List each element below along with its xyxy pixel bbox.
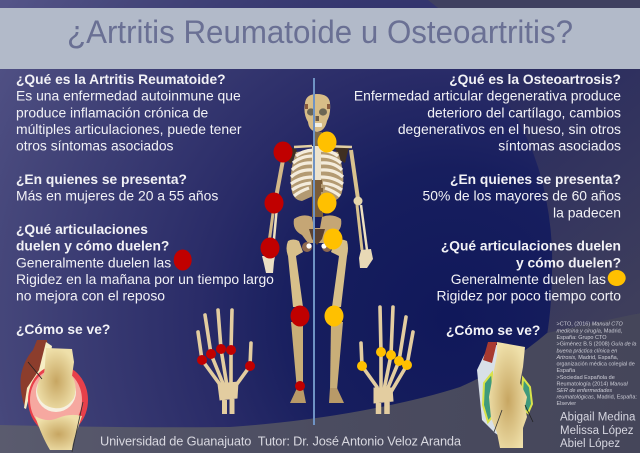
text block: RA joints (16, 254, 274, 304)
text block: RA joints: no mejora con el reposo (16, 288, 165, 304)
references: Artrosis, Madrid, España, (556, 355, 619, 361)
joint illustration: RA (20, 340, 88, 452)
clavicles (294, 146, 352, 147)
text block: RA joints: Rigidez en la mañana por un tiempo largo (16, 271, 274, 287)
text block: OA definition: Enfermedad articular degenerativa produce (354, 88, 621, 104)
heading: joints RA: ¿Qué articulaciones (16, 222, 148, 237)
references: buena práctica clínica en (556, 348, 617, 354)
text block: RA who: Más en mujeres de 20 a 55 años (16, 188, 218, 204)
text block: RA definition: múltiples articulaciones, puede tener (16, 121, 242, 137)
left arm (268, 160, 283, 250)
skeleton (260, 94, 373, 403)
scapulae (284, 147, 349, 164)
right hand x-ray (357, 307, 413, 414)
text block: OA definition: síntomas asociados (498, 138, 621, 154)
rib cage base (291, 150, 343, 201)
heading: what is OA: ¿Qué es la Osteoartrosis? (449, 72, 621, 87)
lower right leg (330, 322, 343, 390)
text block: OA who: la padecen (553, 204, 621, 220)
divider line (313, 78, 315, 425)
right arm (351, 150, 367, 250)
footer credit: Universidad de Guanajuato Tutor: Dr. José Antonio Veloz Aranda (100, 434, 462, 448)
references: medicina y cirugía, Madrid, (556, 328, 623, 334)
authors: Melissa López (560, 425, 634, 437)
heading: joints OA: y cómo duelen? (516, 255, 621, 270)
references: SER de enfermedades (556, 388, 612, 394)
authors (560, 412, 636, 450)
icon: red dot legend (174, 250, 192, 270)
text block: OA who (423, 188, 621, 220)
right side band (468, 60, 640, 335)
heading: joints RA: duelen y cómo duelen? (16, 239, 169, 254)
text block: RA definition: produce inflamación crónica de (16, 104, 209, 120)
left hand carpals (218, 382, 238, 400)
joint illustration: OA (477, 342, 533, 448)
yellow joints (318, 132, 344, 326)
text block: OA joints (436, 271, 621, 304)
heading: look RA: ¿Cómo se ve? (16, 322, 110, 337)
left column text (16, 72, 274, 337)
text block: RA joints: Generalmente duelen las (16, 254, 171, 270)
pelvis (294, 215, 341, 243)
left hand (262, 256, 275, 273)
references: organización médica colegial de (556, 362, 635, 368)
heading: who RA: ¿En quienes se presenta? (16, 172, 187, 187)
references: >CTO, (2016) Manual CTO (556, 322, 624, 328)
left leg (286, 240, 303, 307)
references: España: Grupo CTO (556, 335, 607, 341)
yellow finger dots (357, 347, 412, 371)
text block: OA joints: Generalmente duelen las (451, 271, 606, 287)
left hand forearm (224, 399, 232, 414)
text block: OA joints: Rigidez por poco tiempo corto (436, 288, 621, 304)
sternum (312, 146, 321, 180)
right leg (331, 240, 348, 307)
red finger dots (197, 344, 255, 371)
skull (304, 94, 330, 132)
heading: what is RA: ¿Qué es la Artritis Reumatoide? (16, 72, 226, 87)
heading: joints OA: ¿Qué articulaciones duelen (441, 239, 621, 254)
heading: joints RA (16, 222, 169, 254)
text block: RA definition: otros síntomas asociados (16, 138, 174, 154)
references: España (556, 368, 576, 374)
text block: RA definition (16, 88, 242, 154)
ribs (291, 150, 343, 196)
lumbar spine (312, 180, 323, 217)
references: >Giménez B.S (2008) Guía de la (556, 342, 636, 348)
heading: look OA: ¿Cómo se ve? (446, 323, 540, 338)
left hand fingers (198, 310, 251, 386)
references: Reumatología (2014) Manual (556, 382, 629, 388)
feet (290, 388, 344, 403)
heading: joints OA (441, 239, 621, 270)
text block: OA who: 50% de los mayores de 60 años (423, 188, 621, 204)
text block: OA definition: deterioro del cartílago, cambios (427, 104, 621, 120)
hip sockets (302, 242, 332, 252)
title banner (0, 8, 640, 69)
icon: yellow dot legend (608, 270, 626, 286)
sacrum (309, 229, 325, 245)
authors: Abiel López (560, 438, 620, 450)
right hand forearm (378, 402, 387, 414)
neck vertebrae (313, 132, 322, 146)
right hand fingers (361, 307, 413, 392)
title: ¿Artritis Reumatoide u Osteoartritis? (67, 14, 573, 50)
text block: OA definition (354, 88, 621, 154)
references (556, 322, 637, 407)
authors: Abigail Medina (560, 412, 636, 424)
left hand x-ray (197, 310, 255, 414)
text block: RA definition: Es una enfermedad autoinmune que (16, 88, 241, 104)
lower left leg (291, 322, 303, 390)
right hand (359, 249, 373, 268)
references: Elsevier (556, 401, 576, 407)
red joints (260, 142, 310, 391)
references: reumatológicas, Madrid, España: (556, 395, 637, 401)
text block: OA definition: degenerativos en el hueso, sin otros (398, 121, 621, 137)
top corner band (428, 0, 640, 8)
right hand carpals (374, 388, 393, 403)
footer band (0, 313, 640, 453)
heading: who OA: ¿En quienes se presenta? (450, 172, 621, 187)
right column text (354, 72, 626, 338)
references: >Sociedad Española de (556, 375, 615, 381)
